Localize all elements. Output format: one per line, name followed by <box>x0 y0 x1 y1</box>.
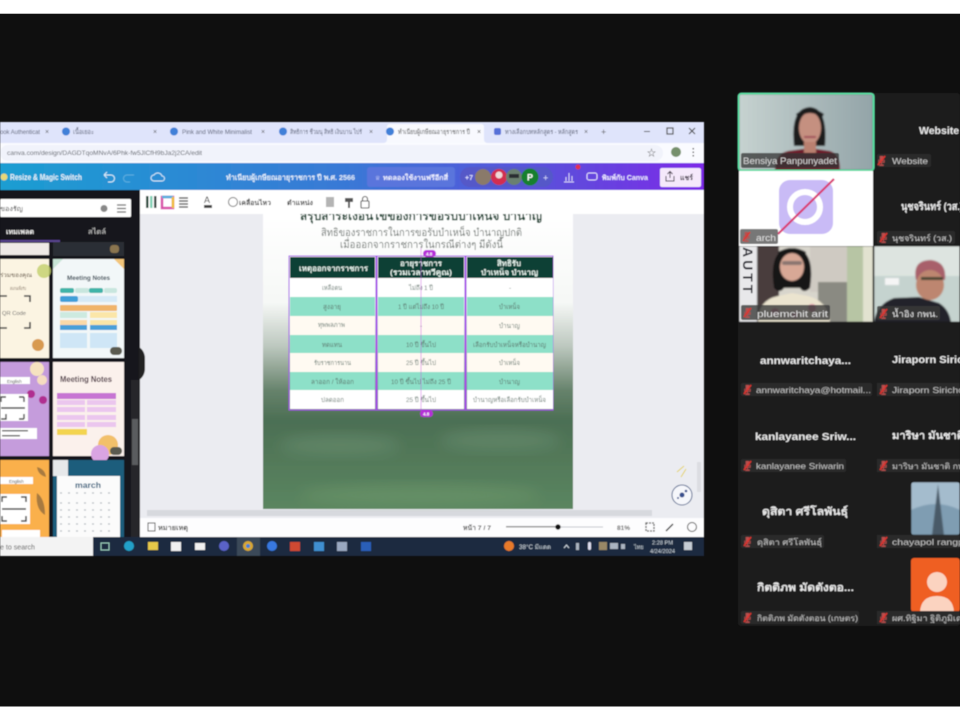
Windows taskbar: ไทย <box>633 544 644 551</box>
participant: Bensiya Panpunyadet: Bensiya Panpunyadet <box>743 156 838 166</box>
template: QR code cream: QR Code <box>2 311 26 317</box>
column: years of service: 1 ปี แต่ไม่ถึง 10 ปี <box>398 303 444 311</box>
participant: น้ำอิง กพน. <box>874 246 960 322</box>
column: years of service: 25 ปี ขึ้นไป <box>406 395 436 404</box>
Canva header bar: พิมพ์กับ Canva <box>602 173 648 182</box>
selection guides <box>376 248 466 417</box>
Canva header bar: + <box>543 173 548 183</box>
participant: chayapol <box>877 482 960 548</box>
column: entitlement <box>467 257 553 409</box>
benefits table <box>289 248 553 417</box>
column: years of service: 10 ปี ขึ้นไป <box>406 340 436 349</box>
sidebar tabs: สไตล์ <box>88 227 106 236</box>
participant: annwaritchaya: annwaritchaya... <box>760 355 851 367</box>
participant: annwaritchaya <box>741 355 872 396</box>
participant: ผศ.ทิฐิมา: ผศ.ทิฐิมา ฐิติภูมิเดช <box>892 614 960 624</box>
participant: pluemchit arit: pluemchit arit <box>757 309 829 319</box>
participant: Bensiya Panpunyadet <box>738 94 874 170</box>
editor footer bar: 81% <box>617 525 630 532</box>
participant: มาริษา: มาริษา มันชาติ <box>892 430 960 442</box>
column: entitlement: เลือกรับบำเหน็จหรือบำนาญ <box>473 340 546 349</box>
column: reason for leaving: ทุพพลภาพ <box>318 322 345 329</box>
Windows taskbar: 4/24/2024 <box>650 549 675 555</box>
Canva header bar: +7 <box>465 175 473 182</box>
participant: น้ำอิง กพน.: น้ำอิง กพน. <box>892 308 938 319</box>
browser address bar: canva.com/design/DAGDTqoMNvA/6Phk-fw5JlCfH9bJa2j2CA/edit <box>7 150 202 157</box>
participant: kanlayanee: kanlayanee Sriwarin <box>756 461 844 471</box>
browser tab strip: Pink and White Minimalist <box>182 129 252 136</box>
template: March calendar <box>53 460 124 537</box>
sidebar tabs: เทมเพลต <box>6 229 34 236</box>
browser tab strip: × <box>261 129 265 136</box>
column: years of service <box>378 257 464 409</box>
design page subtitle: เมื่อออกจากราชการในกรณีต่างๆ มีดังนี้ <box>340 237 504 251</box>
browser tab strip: สิทธิการ ชีวมนุ สิทธิ เงินบาน ไปรั <box>290 128 362 136</box>
template: QR code orange: English <box>9 479 24 484</box>
editor toolbar <box>140 190 704 214</box>
sidebar search box <box>0 199 131 217</box>
selection guides: 4.8 <box>423 412 430 416</box>
design page subtitle: สิทธิของราชการในการขอรับบำเหน็จ บำนาญปกติ <box>321 225 522 239</box>
design page subtitle <box>321 225 522 251</box>
column: entitlement: บำนาญ <box>499 378 520 386</box>
participant: กิตติภพ <box>741 582 859 624</box>
column: reason for leaving: ทดแทน <box>322 342 343 349</box>
participant: Website: Website <box>919 125 959 137</box>
column: years of service: - <box>420 323 422 330</box>
Windows taskbar: 38°C มีแดด <box>519 543 551 551</box>
Windows taskbar <box>0 537 704 556</box>
column: entitlement: บำเหน็จ <box>499 358 520 367</box>
participant: arch: arch <box>756 233 776 243</box>
template: meeting notes blue <box>53 259 124 358</box>
template: QR code purple: English <box>7 379 22 384</box>
Canva header bar: Resize & Magic Switch <box>10 173 82 182</box>
column: reason for leaving: ลาออก / ให้ออก <box>311 378 354 386</box>
selection guides: 4.8 <box>426 252 433 256</box>
template: QR code cream: สแกนเพื่อรับ <box>10 285 26 291</box>
column: reason for leaving <box>290 257 375 409</box>
browser tab strip: ทำเนียบผู้เกษียณอายุราชการ ปี <box>398 128 470 136</box>
column: entitlement: บำนาญหรือเลือกรับบำเหน็จ <box>473 395 546 404</box>
editor toolbar: A <box>204 195 210 205</box>
participant: Website: Website <box>892 156 928 166</box>
editor toolbar: ตำแหน่ง <box>287 199 313 207</box>
participant gallery panel <box>738 93 960 626</box>
design page title: สรุปสาระเงื่อนไขของการขอรับบำเหน็จ บำนาญ <box>300 207 542 224</box>
browser tab strip <box>0 122 704 143</box>
template: Meeting Notes pink: Meeting Notes <box>60 375 113 384</box>
sidebar scrollbar <box>131 380 139 537</box>
participant: kanlayanee: kanlayanee Sriw... <box>755 431 856 443</box>
column: entitlement: บำเหน็จ <box>499 302 520 311</box>
browser tab strip: ทางเลือกบทหลักสูตร - หลักสูตร <box>505 128 578 136</box>
browser tab strip: × <box>584 129 588 136</box>
participant: kanlayanee <box>741 431 856 472</box>
browser tab strip: × <box>369 129 373 136</box>
template: QR code purple <box>0 362 49 456</box>
browser address bar <box>0 143 704 163</box>
browser tab strip: × <box>153 129 157 136</box>
column: years of service: (รวมเวลาทวีคูณ) <box>390 268 453 278</box>
Canva header bar: P <box>527 172 533 182</box>
design page: green gradient background <box>263 214 573 509</box>
column: years of service: 25 ปี ขึ้นไป <box>406 358 436 367</box>
participant: ดุสิตา <box>741 505 848 548</box>
participant: Jiraporn: Jiraporn Siricho <box>892 385 960 395</box>
participant: กิตติภพ: กิตติภพ มัดตังตอ... <box>756 582 854 594</box>
participant: Website <box>877 125 959 167</box>
column: entitlement: สิทธิรับ <box>497 259 521 268</box>
participant: นุชจรินทร์: นุชจรินทร์ (วส.) <box>892 233 952 243</box>
assistant button <box>672 466 692 505</box>
participant: Jiraporn <box>877 354 960 396</box>
participant: ดุสิตา: ดุสิตา ศรีโลพันธุ์ <box>762 505 848 519</box>
Canva header bar: ♕ <box>375 175 380 182</box>
browser tab strip: + <box>601 127 606 137</box>
template: meeting notes blue: Meeting Notes <box>67 276 111 282</box>
Windows taskbar: 2:28 PM <box>652 540 673 546</box>
column: reason for leaving: รับราชการนาน <box>314 359 351 367</box>
participant: นุชจรินทร์ <box>877 200 960 244</box>
Canva header bar <box>0 163 704 190</box>
shared screen: browser window <box>0 122 704 556</box>
template thumbnail strip row 1 <box>0 242 124 256</box>
sidebar tabs <box>0 227 106 242</box>
column: reason for leaving: เหตุออกจากราชการ <box>299 264 369 274</box>
column: years of service: 10 ปี ขึ้นไป ไม่ถึง 25 ปี <box>391 377 451 386</box>
Canva header bar: ทำเนียบผู้เกษียณอายุราชการ ปี พ.ศ. 2566 <box>226 173 355 183</box>
column: reason for leaving: เหลือตน <box>322 284 342 292</box>
template: QR code orange <box>0 460 49 537</box>
column: entitlement: บำนาญ <box>499 322 520 330</box>
Windows taskbar: e to search <box>0 544 35 552</box>
column: reason for leaving: สูงอายุ <box>323 304 341 311</box>
participant: chayapol: chayapol rangp <box>892 537 960 547</box>
browser address bar: ☆ <box>647 148 656 158</box>
participant: กิตติภพ: กิตติภพ มัดตังตอน (เกษตร) <box>757 614 858 623</box>
browser tab strip: เนื้อเยอะ <box>73 127 94 136</box>
participant: pluemchit arit: AUTT <box>740 247 756 296</box>
template: Meeting Notes pink <box>53 362 124 463</box>
participant: pluemchit arit <box>739 246 873 322</box>
editor footer bar: หมายเหตุ <box>158 525 188 532</box>
canvas workspace <box>139 214 704 518</box>
column: reason for leaving: ปลดออก <box>321 397 344 404</box>
browser tab strip: × <box>477 129 481 136</box>
column: years of service: ไม่ถึง 1 ปี <box>408 284 433 292</box>
participant: ดุสิตา: ดุสิตา ศรีโลพันธุ์ <box>757 537 822 547</box>
column: entitlement: บำเหน็จ บำนาญ <box>481 267 539 277</box>
sidebar search box: ของรัญ <box>0 205 24 213</box>
template: QR code cream: ร่วมของคุณ <box>0 272 32 279</box>
participant: มาริษา: มาริษา มันชาติ กพ <box>892 462 960 471</box>
browser tab strip: × <box>45 129 49 136</box>
Canva header bar: แชร์ <box>680 173 693 182</box>
template: March calendar: march <box>75 481 101 490</box>
editor footer bar: หน้า 7 / 7 <box>463 523 491 532</box>
editor footer bar <box>140 518 704 537</box>
Canva header bar: ทดลองใช้งานฟรีอีกสี่ <box>383 172 449 182</box>
column: years of service: อายุราชการ <box>400 259 443 268</box>
template: QR code cream <box>0 259 51 358</box>
participant: ผศ.ทิฐิมา <box>877 558 960 624</box>
editor toolbar: เคลื่อนไหว <box>239 197 271 207</box>
participant: มาริษา <box>877 430 960 472</box>
browser tab strip: ook Authenticat <box>0 129 40 136</box>
left sidebar panel <box>0 190 140 537</box>
column: entitlement: - <box>509 285 511 292</box>
participant: arch <box>739 171 873 246</box>
participant: annwaritchaya: annwaritchaya@hotmail... <box>756 385 871 395</box>
